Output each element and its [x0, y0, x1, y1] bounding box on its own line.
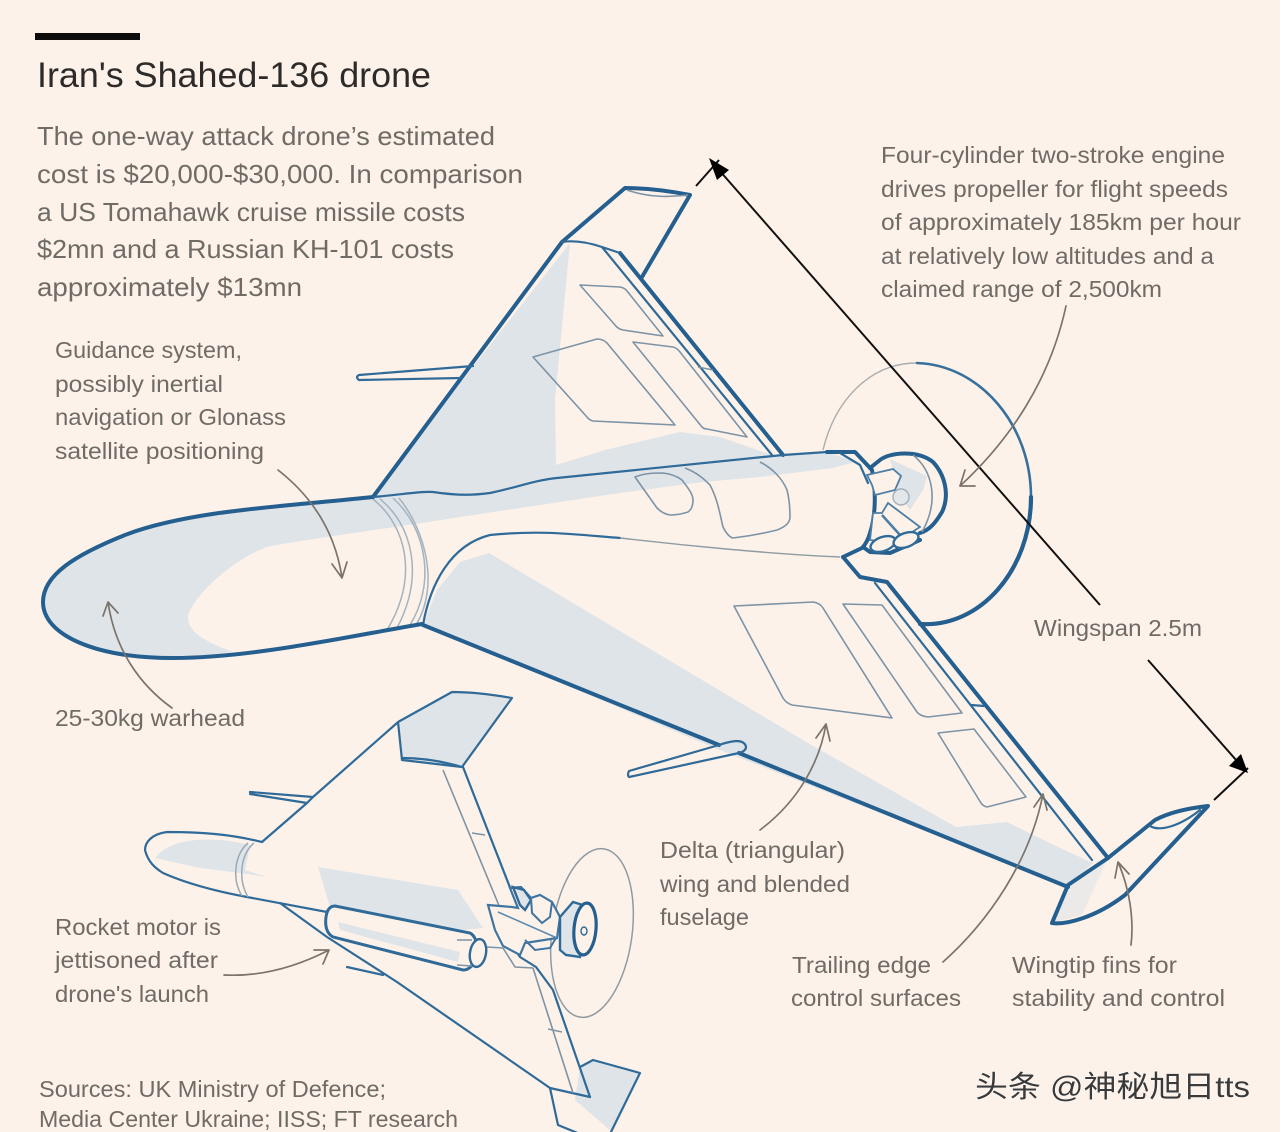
upper wingtip fin — [398, 692, 512, 767]
callout: rocket motor: Rocket motor is — [55, 914, 221, 940]
fuselage and nose outline — [43, 497, 422, 658]
upper winglet spike — [357, 366, 473, 380]
lower wingtip fin — [550, 1060, 640, 1132]
arrow: rocket motor — [224, 950, 329, 975]
callout: rocket motor: jettisoned after — [54, 947, 218, 973]
fuselage fairing rings — [373, 498, 428, 630]
upper wing outline with wingtip fin — [373, 188, 690, 497]
callout: engine: claimed range of 2,500km — [881, 276, 1162, 302]
header accent bar — [35, 33, 140, 40]
arrow: guidance system — [278, 470, 347, 578]
callout: delta wing: wing and blended — [659, 871, 850, 897]
intro text block: a US Tomahawk cruise missile costs — [37, 197, 465, 227]
small drone fairing rings — [236, 843, 254, 897]
callout: guidance system: possibly inertial — [55, 371, 223, 397]
callout: delta wing: fuselage — [660, 904, 749, 930]
lower winglet spike — [628, 741, 746, 777]
callout: wingtip fins: stability and control — [1012, 985, 1225, 1011]
wingtip fin — [1052, 806, 1208, 923]
callout: warhead: 25-30kg warhead — [55, 705, 245, 731]
intro text block: $2mn and a Russian KH-101 costs — [37, 234, 454, 264]
sources: Sources: UK Ministry of Defence; — [39, 1076, 386, 1102]
callout: engine: Four-cylinder two-stroke engine — [881, 142, 1225, 168]
upper wing panels — [533, 285, 747, 437]
watermark: 头条 @神秘旭日tts — [975, 1071, 1250, 1104]
callout: trailing edge — [791, 952, 961, 1011]
label: wingspan: Wingspan 2.5m — [1034, 615, 1202, 641]
arrow: wingtip fins — [1115, 862, 1132, 945]
upper wing trailing edge — [620, 253, 783, 455]
callout: engine — [881, 142, 1241, 302]
callout: engine: at relatively low altitudes and a — [881, 243, 1215, 269]
lower wing leading edge — [423, 625, 1068, 887]
small drone wing and nose outline — [145, 723, 397, 912]
callout: guidance system: satellite positioning — [55, 438, 264, 464]
engine cowl — [870, 454, 946, 533]
callout: guidance system — [55, 337, 286, 464]
callout: wingtip fins: Wingtip fins for — [1012, 952, 1177, 978]
arrow: engine — [960, 306, 1066, 486]
arrow: delta wing — [760, 724, 830, 830]
small drone propeller disc — [541, 843, 643, 1023]
arrow: trailing edge — [943, 794, 1047, 962]
fuselage top line — [373, 452, 853, 497]
fuselage access panels — [635, 462, 790, 538]
callout: wingtip fins — [1012, 952, 1225, 1011]
callout: delta wing — [659, 837, 850, 930]
lower wing root curve — [423, 533, 620, 625]
arrow: warhead — [103, 602, 172, 708]
shading: lower wing — [423, 553, 1093, 887]
shading: upper wing and fuselage — [370, 243, 855, 517]
upper trailing edge — [463, 767, 518, 908]
callout: guidance system: navigation or Glonass — [55, 404, 286, 430]
intro text block: The one-way attack drone’s estimated — [37, 121, 495, 151]
wingspan dimension line — [696, 158, 1248, 800]
shading: nose — [43, 497, 460, 658]
shading: wingtip fin — [1052, 858, 1108, 923]
small drone illustration with rocket booster — [145, 692, 643, 1132]
engine shading — [890, 459, 927, 510]
rocket booster — [326, 906, 503, 970]
callout: engine: drives propeller for flight speeds — [881, 176, 1228, 202]
callout: engine: of approximately 185km per hour — [881, 209, 1241, 235]
engine cylinders — [867, 469, 901, 495]
sources: Media Center Ukraine; IISS; FT research — [39, 1106, 458, 1132]
propeller disc — [823, 363, 1031, 624]
callout: guidance system: Guidance system, — [55, 337, 242, 363]
title: Iran's Shahed-136 drone — [37, 56, 431, 95]
callout: delta wing: Delta (triangular) — [660, 837, 845, 863]
intro text block — [37, 121, 523, 302]
callout: trailing edge: control surfaces — [791, 985, 961, 1011]
callout: rocket motor — [54, 914, 221, 1007]
lower wing trailing edge — [843, 557, 1108, 858]
lower trailing edge — [513, 947, 590, 1097]
engine and pusher assembly — [827, 452, 946, 557]
intro text block: approximately $13mn — [37, 272, 302, 302]
callout: rocket motor: drone's launch — [55, 981, 209, 1007]
main drone illustration — [43, 188, 1208, 923]
small drone shading — [155, 692, 512, 930]
lower wing panels — [734, 602, 1026, 807]
small drone engine — [488, 887, 598, 957]
intro text block: cost is $20,000-$30,000. In comparison — [37, 159, 523, 189]
sources — [39, 1076, 458, 1132]
callout: trailing edge: Trailing edge — [792, 952, 931, 978]
lower leading edge — [280, 903, 590, 1097]
